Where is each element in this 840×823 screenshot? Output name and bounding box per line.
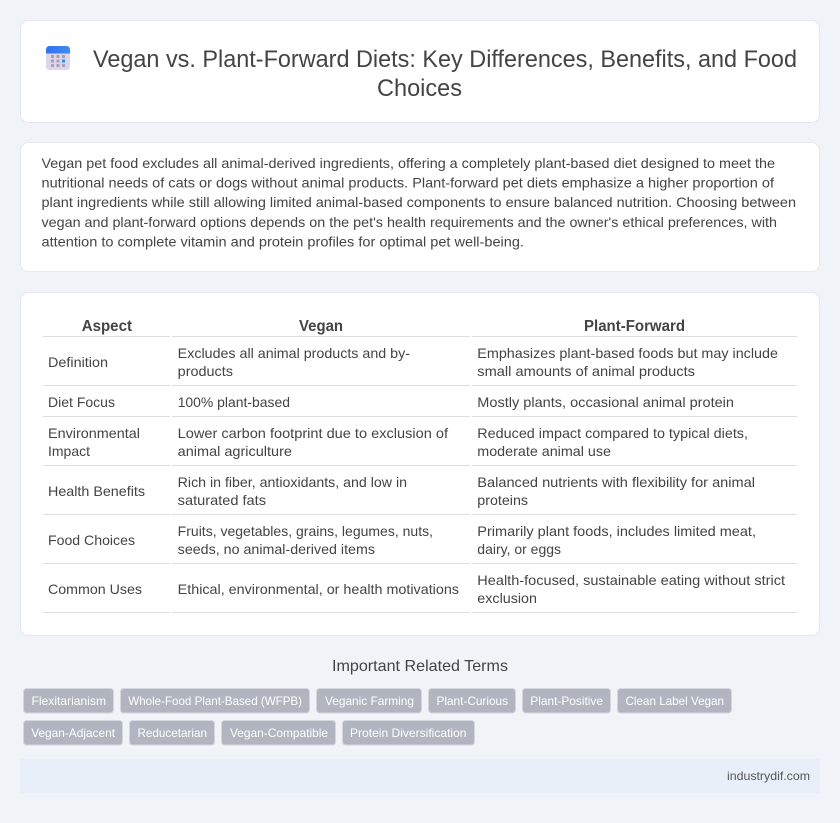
table row: health benefits: Balanced nutrients with flexibility for animal — [477, 474, 755, 490]
table header row: Plant-Forward — [584, 318, 685, 335]
table row: food choices: seeds, no animal-derived items — [178, 541, 375, 557]
heading: important related terms: Important Related Terms — [332, 658, 508, 675]
table row: environmental impact — [43, 425, 797, 466]
table row: environmental impact: Reduced impact compared to typical diets, — [477, 425, 748, 441]
tag list: related terms: Plant-Curious — [436, 694, 508, 708]
text block: introduction paragraph: attention to complete vitamin and protein profiles for optimal pet well-being. — [42, 233, 524, 249]
tag list: related terms: Reducetarian — [138, 726, 207, 740]
table header row: Vegan — [299, 318, 343, 335]
table row: definition: products — [178, 363, 233, 379]
table row: health benefits: Health Benefits — [48, 483, 145, 499]
table row: diet focus: 100% plant-based — [178, 394, 290, 410]
table row: diet focus: Diet Focus — [48, 394, 115, 410]
table row: common uses: Ethical, environmental, or health motivations — [178, 581, 459, 597]
table row: environmental impact: Lower carbon footprint due to exclusion of — [178, 425, 448, 441]
title: Choices — [377, 75, 462, 102]
text block: introduction paragraph: plant ingredients while still allowing limited animal-based components to ensure balanced nutrition. Choosing between — [42, 194, 796, 210]
table row: food choices: Fruits, vegetables, grains, legumes, nuts, — [178, 523, 433, 539]
table row: definition: Emphasizes plant-based foods but may include — [477, 345, 778, 361]
table row: food choices: dairy, or eggs — [477, 541, 561, 557]
table row: common uses: exclusion — [477, 590, 537, 606]
table row: food choices: Primarily plant foods, includes limited meat, — [477, 523, 756, 539]
table row: health benefits: Rich in fiber, antioxidants, and low in — [178, 474, 407, 490]
table row: definition: small amounts of animal products — [477, 363, 695, 379]
table row: common uses: Common Uses — [48, 581, 142, 597]
table row: definition: Excludes all animal products and by- — [178, 345, 410, 361]
table row: health benefits: saturated fats — [178, 492, 266, 508]
tag list: related terms — [24, 688, 732, 745]
table row: diet focus: Mostly plants, occasional animal protein — [477, 394, 734, 410]
panel: introduction — [20, 142, 820, 272]
title: Vegan vs. Plant-Forward Diets: Key Differences, Benefits, and Food — [93, 46, 797, 73]
table row: environmental impact: Impact — [48, 443, 90, 459]
table row: environmental impact: animal agriculture — [178, 443, 292, 459]
tag list: related terms: Vegan-Adjacent — [31, 726, 116, 740]
panel: comparison table — [20, 292, 820, 636]
table row: environmental impact: Environmental — [48, 425, 140, 441]
tag list: related terms: Plant-Positive — [530, 694, 603, 708]
tag list: related terms: Protein Diversification — [350, 726, 466, 740]
table row: food choices — [43, 523, 797, 564]
table row: food choices: Food Choices — [48, 532, 135, 548]
table row: health benefits: proteins — [477, 492, 528, 508]
table row: diet focus — [43, 394, 797, 417]
table row: health benefits — [43, 474, 797, 515]
table row: common uses — [43, 572, 797, 613]
tag list: related terms: Vegan-Compatible — [230, 726, 328, 740]
tag list: related terms: Veganic Farming — [325, 694, 414, 708]
table row: definition — [43, 345, 797, 386]
footer — [20, 759, 820, 793]
text block: introduction paragraph: vegan and plant-forward options depends on the pet's health requirements and the owner's ethical preferences, with — [42, 214, 777, 230]
title — [93, 46, 797, 102]
tag list: related terms: Clean Label Vegan — [626, 694, 724, 708]
text block: introduction paragraph: Vegan pet food excludes all animal-derived ingredients, offering a completely plant-based diet designed to meet the — [42, 155, 775, 171]
panel: header — [20, 20, 820, 122]
footer: industrydif.com — [727, 769, 810, 783]
table header row — [43, 318, 797, 337]
table header row: Aspect — [82, 318, 133, 335]
table row: environmental impact: moderate animal use — [477, 443, 611, 459]
text block: introduction paragraph — [42, 155, 796, 249]
icon: calendar — [46, 46, 70, 70]
text block: introduction paragraph: nutritional needs of cats or dogs without animal products. Plant-forward pet diets emphasize a higher proportion of — [42, 175, 774, 191]
table row: common uses: Health-focused, sustainable eating without strict — [477, 572, 785, 588]
tag list: related terms: Flexitarianism — [32, 694, 106, 708]
table row: definition: Definition — [48, 354, 108, 370]
tag list: related terms: Whole-Food Plant-Based (WFPB) — [128, 694, 302, 708]
